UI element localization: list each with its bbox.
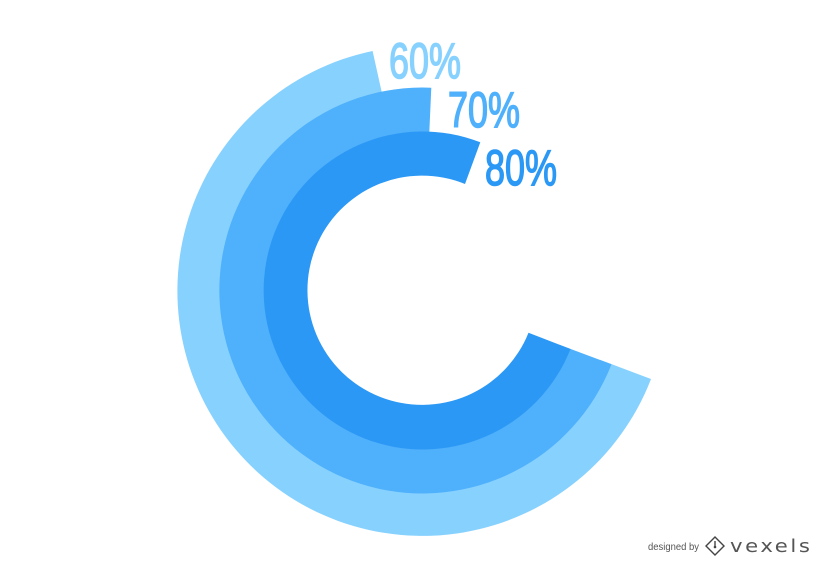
label: 70%: 70% — [448, 82, 520, 138]
icon: vexels diamond — [706, 537, 724, 555]
ring: 60% light blue — [177, 51, 651, 536]
ring chart — [177, 51, 651, 536]
label: 60%: 60% — [389, 33, 461, 89]
ring: 70% medium blue — [219, 88, 611, 494]
watermark wordmark: vexels — [730, 536, 810, 557]
ring: 80% dark blue — [264, 131, 570, 449]
label: 80%: 80% — [485, 140, 557, 196]
watermark caption: designed by — [648, 542, 699, 553]
watermark: designed by vexels — [648, 536, 810, 557]
